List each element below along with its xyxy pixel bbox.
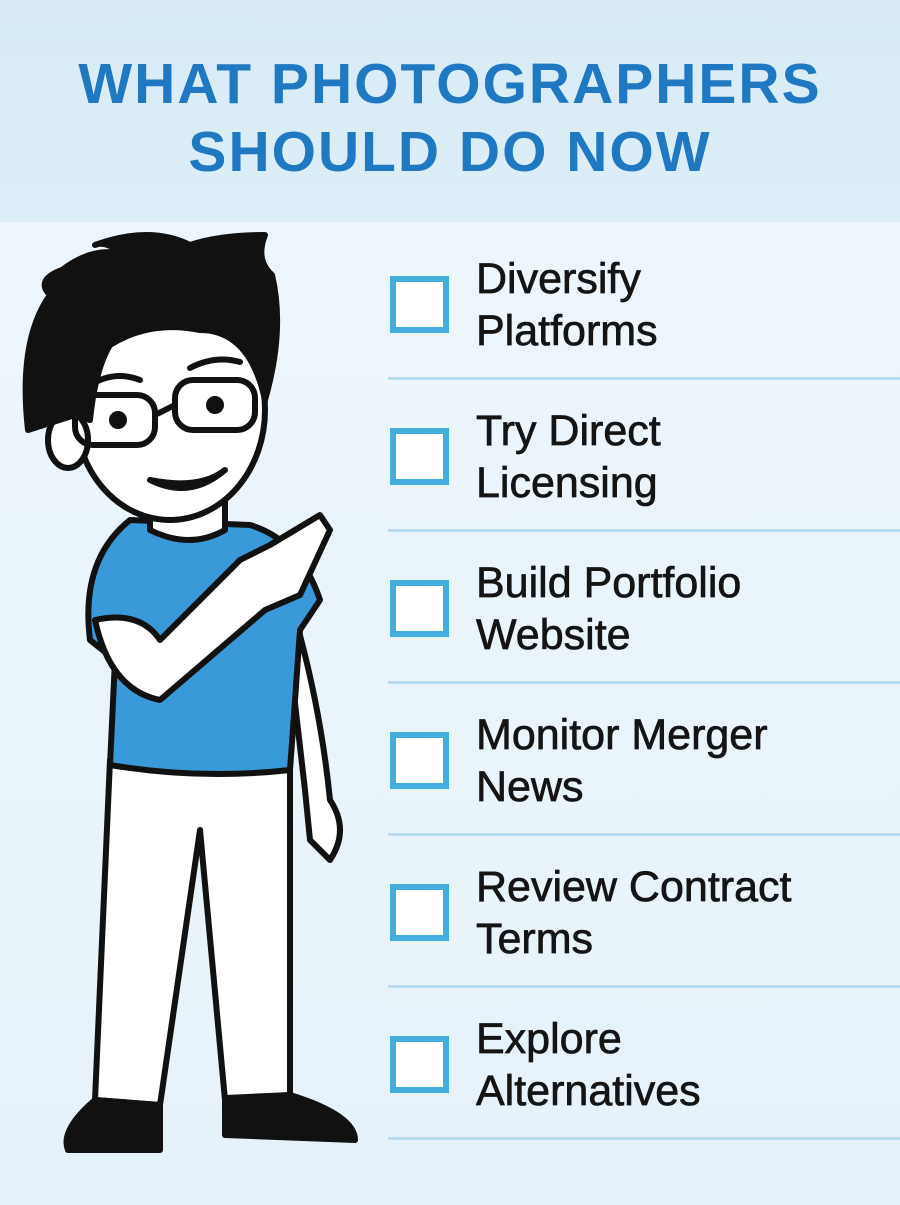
item: Explore Alternatives: [388, 1015, 900, 1140]
item: Diversify Platforms: Diversify: [476, 255, 641, 303]
item: Build Portfolio Website: Website: [476, 611, 631, 659]
item: Monitor Merger News: News: [476, 763, 584, 811]
title: [78, 52, 822, 184]
header band: [0, 0, 900, 222]
head: [75, 300, 265, 520]
neck: [150, 490, 225, 540]
item: Monitor Merger News: Monitor Merger: [476, 711, 768, 759]
item: Build Portfolio Website: Build Portfolio: [476, 559, 741, 607]
item: Try Direct Licensing: Licensing: [476, 459, 658, 507]
item: Review Contract Terms: Terms: [476, 915, 593, 963]
item: Try Direct Licensing: [388, 407, 900, 532]
title: WHAT PHOTOGRAPHERS: [78, 52, 822, 116]
item: Explore Alternatives: Alternatives: [476, 1067, 701, 1115]
character illustration: [22, 232, 358, 1153]
item: Review Contract Terms: [388, 863, 900, 988]
item: Diversify Platforms: [388, 255, 900, 380]
smile: [150, 470, 225, 488]
item: Monitor Merger News: [388, 711, 900, 836]
shoes: [67, 1100, 160, 1150]
glasses: [75, 395, 155, 445]
hair: [26, 235, 277, 430]
item: Diversify Platforms: Platforms: [476, 307, 658, 355]
shirt: [88, 520, 320, 774]
item: Review Contract Terms: Review Contract: [476, 863, 791, 911]
item: Try Direct Licensing: Try Direct: [476, 407, 661, 455]
legs: [95, 760, 290, 1105]
item: Explore Alternatives: Explore: [476, 1015, 622, 1063]
ear: [48, 412, 88, 468]
checklist: [388, 255, 900, 1140]
right arm pointing: [95, 515, 330, 700]
title: SHOULD DO NOW: [188, 120, 712, 184]
left arm: [290, 600, 340, 860]
item: Build Portfolio Website: [388, 559, 900, 684]
